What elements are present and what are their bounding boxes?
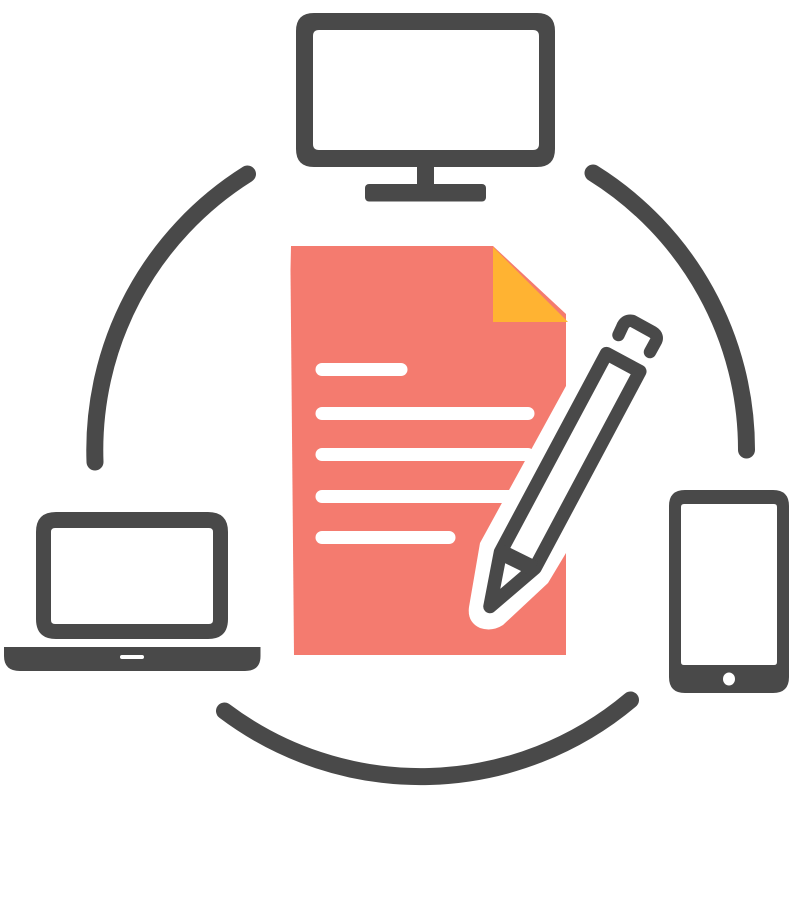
icon: desktop monitor	[296, 13, 555, 202]
document text lines	[316, 363, 534, 544]
document	[290, 246, 568, 655]
cycle arcs	[95, 173, 747, 777]
icon: laptop	[4, 512, 260, 671]
pencil tip band	[500, 552, 535, 569]
document page	[290, 246, 566, 655]
document fold	[493, 247, 568, 322]
pencil clip	[618, 321, 657, 352]
pencil body	[490, 354, 640, 606]
pencil white halo	[469, 300, 680, 629]
icon: smartphone	[669, 490, 789, 693]
pencil	[469, 300, 680, 629]
